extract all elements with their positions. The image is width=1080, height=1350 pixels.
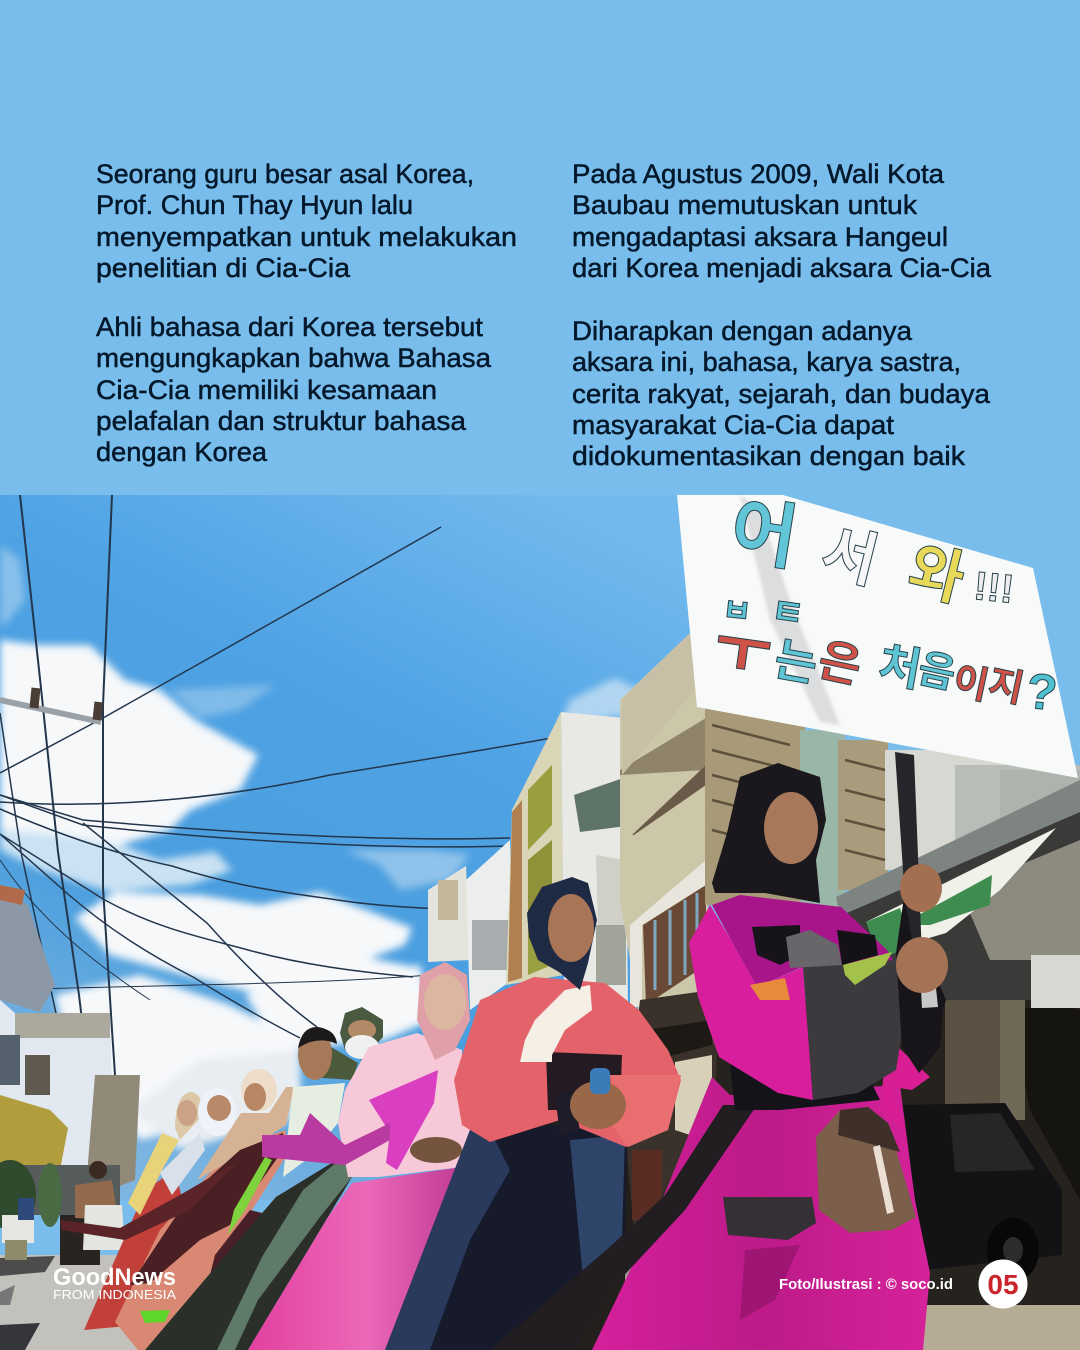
logo: GoodNews from Indonesia: FROM INDONESIA bbox=[53, 1288, 177, 1302]
left distant buildings bbox=[0, 885, 140, 1230]
sign lettering: ? bbox=[1024, 663, 1060, 721]
text block: right column bbox=[572, 159, 992, 471]
sky bbox=[0, 495, 700, 1200]
paragraph: harapan: didokumentasikan dengan baik bbox=[572, 441, 966, 471]
photo credit: Foto/Ilustrasi : © soco.id bbox=[779, 1276, 953, 1293]
photo: parade in hanbok bbox=[0, 490, 1080, 1350]
main woman with sign bbox=[490, 752, 948, 1350]
paragraph: harapan: cerita rakyat, sejarah, dan budaya bbox=[572, 379, 991, 409]
air conditioner bbox=[1031, 955, 1080, 1008]
sign lettering: 처 bbox=[875, 638, 925, 696]
paragraph: Agustus 2009: mengadaptasi aksara Hangeul bbox=[572, 222, 948, 252]
sign pole bbox=[895, 752, 922, 939]
paragraph: Agustus 2009: Pada Agustus 2009, Wali Kota bbox=[572, 159, 945, 189]
sign lettering: !!! bbox=[972, 564, 1016, 612]
sign lettering: ㅜ bbox=[710, 613, 776, 690]
sign lettering: 음 bbox=[914, 647, 959, 697]
white building bbox=[428, 840, 512, 1010]
clouds bbox=[0, 545, 640, 1150]
women at back of line bbox=[60, 1069, 294, 1350]
text block: left column bbox=[96, 159, 517, 467]
paragraph: Agustus 2009: dari Korea menjadi aksara Cia-Cia bbox=[572, 253, 992, 283]
paragraph: harapan: Diharapkan dengan adanya bbox=[572, 316, 913, 346]
sign lettering: 와 bbox=[902, 535, 972, 614]
paragraph: harapan bbox=[572, 316, 991, 471]
woman in pink hanbok bbox=[248, 962, 472, 1350]
small distant people and banner bbox=[2, 1161, 125, 1265]
woman with mask in green hanbok bbox=[145, 1007, 383, 1350]
paragraph: ahli bahasa: mengungkapkan bahwa Bahasa bbox=[96, 343, 492, 373]
white block with balcony bbox=[561, 712, 628, 1002]
paragraph: ahli bahasa: Ahli bahasa dari Korea tersebut bbox=[96, 312, 483, 342]
handbag bbox=[816, 1107, 916, 1233]
sign lettering: 서 bbox=[815, 517, 885, 596]
paragraph: guru besar bbox=[96, 159, 517, 283]
paragraph: guru besar: penelitian di Cia-Cia bbox=[96, 253, 351, 283]
paragraph: ahli bahasa bbox=[96, 312, 492, 467]
paragraph: ahli bahasa: pelafalan dan struktur bahasa bbox=[96, 406, 467, 436]
page number badge: 05 bbox=[987, 1269, 1019, 1300]
paragraph: Agustus 2009 bbox=[572, 159, 992, 283]
sign lettering bbox=[718, 501, 1056, 710]
shop awning and storefront bbox=[716, 780, 1080, 1305]
parked truck bbox=[897, 1103, 1062, 1282]
paragraph: harapan: aksara ini, bahasa, karya sastra, bbox=[572, 347, 961, 377]
paragraph: harapan: masyarakat Cia-Cia dapat bbox=[572, 410, 895, 440]
paragraph: ahli bahasa: dengan Korea bbox=[96, 437, 268, 467]
sign lettering: 이 bbox=[949, 660, 992, 708]
sign lettering: ㅌ bbox=[769, 590, 807, 635]
overhead wires and pole bbox=[0, 495, 562, 1075]
shop banner bbox=[866, 828, 1056, 945]
page number badge bbox=[978, 1260, 1028, 1308]
paragraph: guru besar: Seorang guru besar asal Korea, bbox=[96, 159, 474, 189]
paragraph: Agustus 2009: Baubau memutuskan untuk bbox=[572, 190, 918, 220]
green and cream building bbox=[506, 712, 564, 985]
sign lettering: 지 bbox=[984, 663, 1027, 711]
tan building bbox=[620, 633, 708, 1040]
woman in coral blouse and navy skirt bbox=[385, 877, 681, 1350]
logo: GoodNews from Indonesia: GoodNews bbox=[53, 1264, 176, 1291]
sign lettering: ㅂ bbox=[720, 592, 753, 630]
shop behind women bbox=[542, 992, 717, 1350]
stone building bbox=[705, 705, 1080, 910]
welcome sign bbox=[677, 490, 1078, 778]
sign lettering: 는 bbox=[771, 633, 821, 691]
sign lettering: 어 bbox=[725, 490, 803, 580]
paragraph: guru besar: Prof. Chun Thay Hyun lalu bbox=[96, 190, 413, 220]
paragraph: ahli bahasa: Cia-Cia memiliki kesamaan bbox=[96, 375, 437, 405]
road bbox=[0, 1255, 1080, 1350]
paragraph: guru besar: menyempatkan untuk melakukan bbox=[96, 222, 517, 252]
sign lettering: 은 bbox=[814, 633, 866, 693]
